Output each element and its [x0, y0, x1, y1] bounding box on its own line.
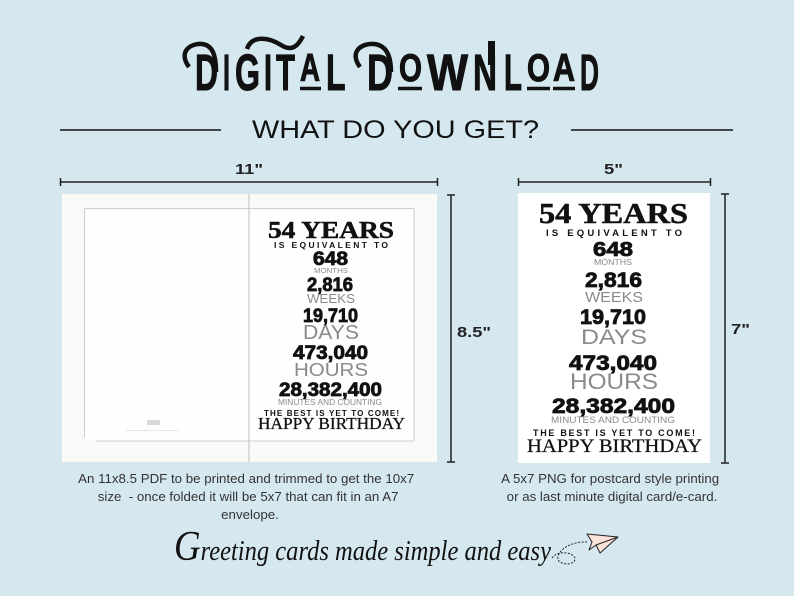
- panel: 11x8.5 PDF card: MONTHS: [314, 266, 348, 275]
- title: Digital Download: D: [367, 44, 393, 101]
- panel: 11x8.5 PDF card: 648: [313, 249, 348, 270]
- panel: 11x8.5 PDF card: DAYS: [303, 322, 359, 344]
- panel: 5x7 PNG card: 19,710: [580, 306, 646, 329]
- title: Digital Download: L: [504, 44, 522, 101]
- panel: 5x7 PNG card: HOURS: [570, 369, 658, 394]
- dimension: 11 inch width: [60, 161, 438, 186]
- panel: 11x8.5 PDF card: MINUTES AND COUNTING: [278, 398, 382, 407]
- caption: PDF description: envelope.: [221, 507, 279, 522]
- panel: 5x7 PNG card: [518, 193, 710, 463]
- caption: PDF description: size - once folded it will be 5x7 that can fit in an A7: [98, 489, 399, 504]
- panel: 11x8.5 PDF card: WEEKS: [307, 291, 355, 306]
- panel: 5x7 PNG card: THE BEST IS YET TO COME!: [533, 428, 695, 438]
- panel: 11x8.5 PDF card: 54 YEARS: [268, 218, 394, 244]
- title: Digital Download: O: [399, 47, 422, 90]
- icon: paper plane with dashed trail: [552, 534, 618, 564]
- panel: 5x7 PNG card: 54 YEARS: [539, 199, 688, 230]
- dimension: 5 inch width: [518, 161, 711, 186]
- subtitle: what do you get: WHAT DO YOU GET?: [252, 116, 539, 144]
- panel: 5x7 PNG card: WEEKS: [585, 289, 643, 306]
- panel: 5x7 PNG card: MINUTES AND COUNTING: [551, 415, 675, 425]
- panel: 5x7 PNG card: 2,816: [585, 269, 642, 292]
- panel: 11x8.5 PDF card: 19,710: [303, 306, 358, 327]
- title: Digital Download: N: [473, 44, 497, 101]
- panel: 11x8.5 PDF card: 2,816: [307, 275, 353, 296]
- panel: 5x7 PNG card: MONTHS: [594, 258, 632, 267]
- title: Digital Download: [185, 36, 599, 101]
- title: Digital Download: I: [223, 44, 230, 101]
- panel: 11x8.5 PDF card: 28,382,400: [279, 380, 382, 401]
- dimension: 7 inch height: [721, 194, 750, 463]
- panel: 5x7 PNG card: IS EQUIVALENT TO: [546, 228, 682, 239]
- title: Digital Download: G: [235, 44, 260, 101]
- title: Digital Download: W: [427, 44, 469, 101]
- panel: 11x8.5 PDF card: HOURS: [294, 360, 368, 380]
- dimension: 8.5 inch height: 8.5": [457, 324, 491, 341]
- dimension: 8.5 inch height: [447, 195, 491, 462]
- caption: PNG description: A 5x7 PNG for postcard style printing: [501, 471, 719, 486]
- panel: 5x7 PNG card: 473,040: [569, 352, 657, 375]
- panel: 11x8.5 PDF card: THE BEST IS YET TO COME!: [264, 409, 399, 418]
- panel: 11x8.5 PDF card: IS EQUIVALENT TO: [274, 240, 388, 250]
- small back-of-card logo: [147, 420, 160, 425]
- panel: 5x7 PNG card: DAYS: [581, 326, 647, 349]
- dimension: 5 inch width: 5": [604, 161, 623, 178]
- panel: 11x8.5 PDF card: 473,040: [293, 343, 368, 364]
- title: Digital Download: D: [195, 44, 218, 101]
- panel: 5x7 PNG card: 28,382,400: [552, 395, 675, 418]
- title: Digital Download: D: [580, 44, 599, 101]
- caption: PDF description: An 11x8.5 PDF to be printed and trimmed to get the 10x7: [78, 471, 414, 486]
- dimension: 11 inch width: 11": [235, 161, 263, 178]
- title: Digital Download: A: [553, 47, 575, 90]
- panel: 5x7 PNG card: HAPPY BIRTHDAY: [527, 436, 702, 457]
- tagline: Greeting cards made simple and easy: [174, 524, 551, 570]
- panel: 11x8.5 PDF card: HAPPY BIRTHDAY: [258, 414, 405, 433]
- title: Digital Download: I: [264, 44, 272, 101]
- dimension: 7 inch height: 7": [731, 321, 750, 338]
- title: Digital Download: O: [527, 47, 550, 90]
- panel: 11x8.5 PDF card: [62, 194, 437, 462]
- caption: PNG description: or as last minute digital card/e-card.: [507, 489, 717, 504]
- panel: 5x7 PNG card: 648: [593, 239, 633, 261]
- title: Digital Download: L: [326, 44, 345, 101]
- title: Digital Download: A: [300, 47, 320, 90]
- title: Digital Download: T: [276, 44, 295, 101]
